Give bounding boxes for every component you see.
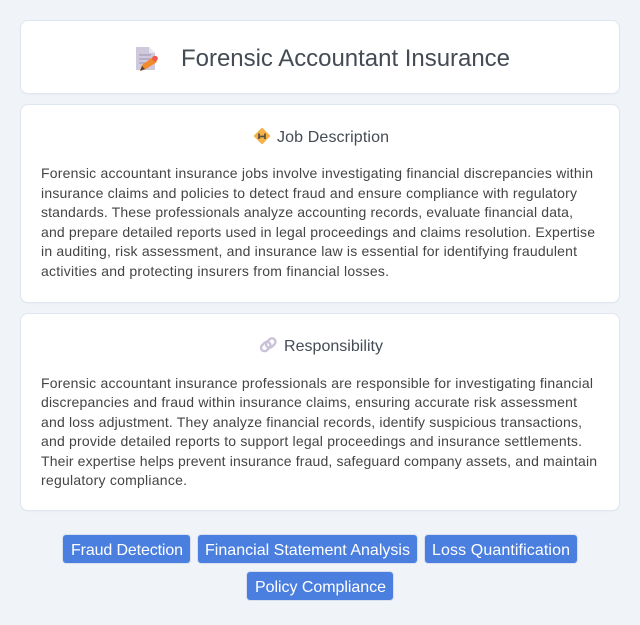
text block: responsibility: Forensic accountant insurance professionals are responsible for investigating financial bbox=[41, 375, 593, 391]
tag: policy compliance bbox=[246, 571, 394, 601]
panel: job description bbox=[20, 104, 620, 303]
panel: responsibility bbox=[20, 313, 620, 511]
tag: financial statement analysis: Financial Statement Analysis bbox=[205, 542, 410, 559]
text block: job description: Forensic accountant insurance jobs involve investigating financial discrepancies within bbox=[41, 165, 593, 181]
tag: fraud detection: Fraud Detection bbox=[71, 542, 183, 559]
text block: job description: standards. These professionals analyze accounting records, evaluate financial data, bbox=[41, 204, 573, 220]
text block: responsibility: regulatory compliance. bbox=[41, 472, 187, 488]
text block: job description bbox=[41, 165, 595, 279]
text block: job description: in auditing, risk assessment, and insurance law is essential for identifying fraudulent bbox=[41, 243, 577, 259]
tag: policy compliance: Policy Compliance bbox=[255, 579, 386, 596]
text block: responsibility: Their expertise helps prevent insurance fraud, safeguard company assets, and maintain bbox=[41, 453, 597, 469]
tag: loss quantification: Loss Quantification bbox=[432, 542, 570, 559]
tag: loss quantification bbox=[424, 534, 578, 564]
text block: job description: activities and protecting insurers from financial losses. bbox=[41, 263, 389, 279]
icon: orange diamond bbox=[254, 128, 270, 144]
text block: responsibility: and provide detailed reports to support legal proceedings and insurance settlements. bbox=[41, 433, 582, 449]
heading: responsibility: Responsibility bbox=[284, 338, 383, 355]
icon: chain link bbox=[260, 337, 277, 353]
text block: responsibility: and loss adjustment. They analyze financial records, identify suspicious transactions, bbox=[41, 414, 582, 430]
panel: title card bbox=[20, 20, 620, 94]
icon: document with pencil bbox=[136, 47, 158, 71]
text block: job description: and prepare detailed reports used in legal proceedings and claims resolution. Expertise bbox=[41, 224, 595, 240]
text block: job description: insurance claims and policies to detect fraud and ensure compliance with regulatory bbox=[41, 185, 577, 201]
text block: responsibility bbox=[41, 375, 597, 488]
tag: financial statement analysis bbox=[197, 534, 418, 564]
heading: job description: Job Description bbox=[277, 129, 389, 146]
title: Forensic Accountant Insurance bbox=[181, 45, 510, 72]
text block: responsibility: discrepancies and fraud within insurance claims, ensuring accurate risk assessment bbox=[41, 394, 577, 410]
tag: fraud detection bbox=[62, 534, 191, 564]
